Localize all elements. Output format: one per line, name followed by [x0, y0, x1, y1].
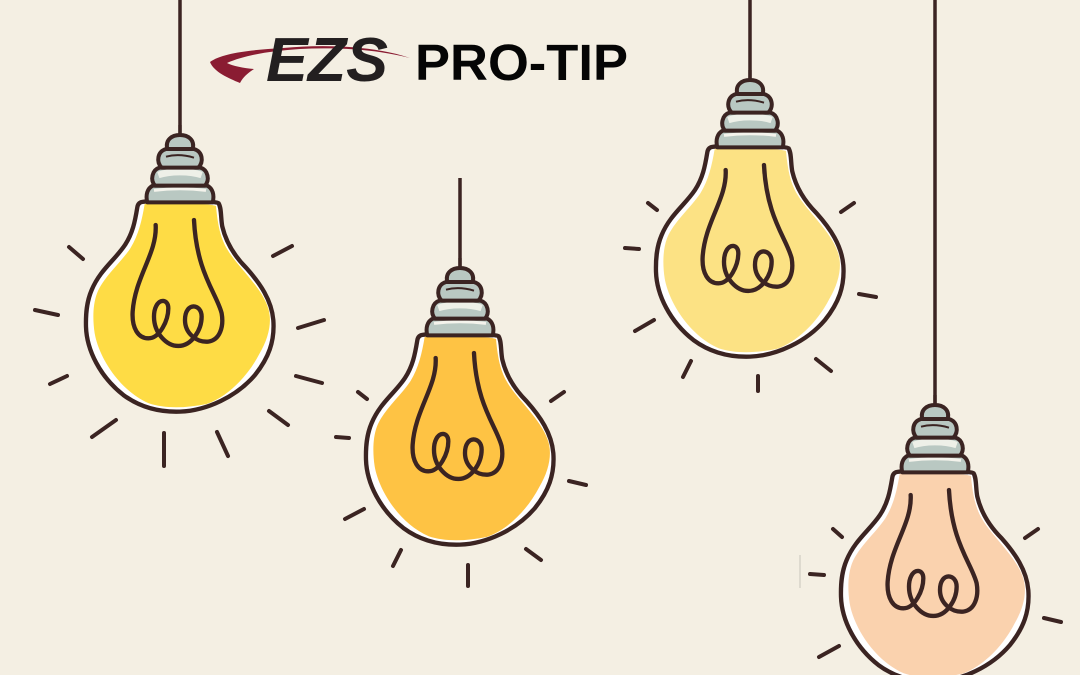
cord [933, 0, 937, 408]
title: PRO-TIP: PRO-TIP [415, 34, 628, 91]
bulb 3: pale yellow [625, 0, 876, 391]
cord [748, 0, 752, 82]
cord [458, 178, 462, 270]
light rays [625, 203, 876, 391]
logo: EZS [210, 26, 410, 95]
light rays [810, 529, 1061, 657]
bulb 1: yellow [35, 0, 324, 466]
bulb 4: peach [810, 0, 1061, 675]
cord [178, 0, 182, 136]
light rays [336, 392, 586, 586]
light rays [35, 246, 324, 466]
bulb 2: orange [336, 178, 586, 586]
logo wordmark: EZS [266, 26, 388, 95]
logo swoosh [210, 46, 410, 83]
